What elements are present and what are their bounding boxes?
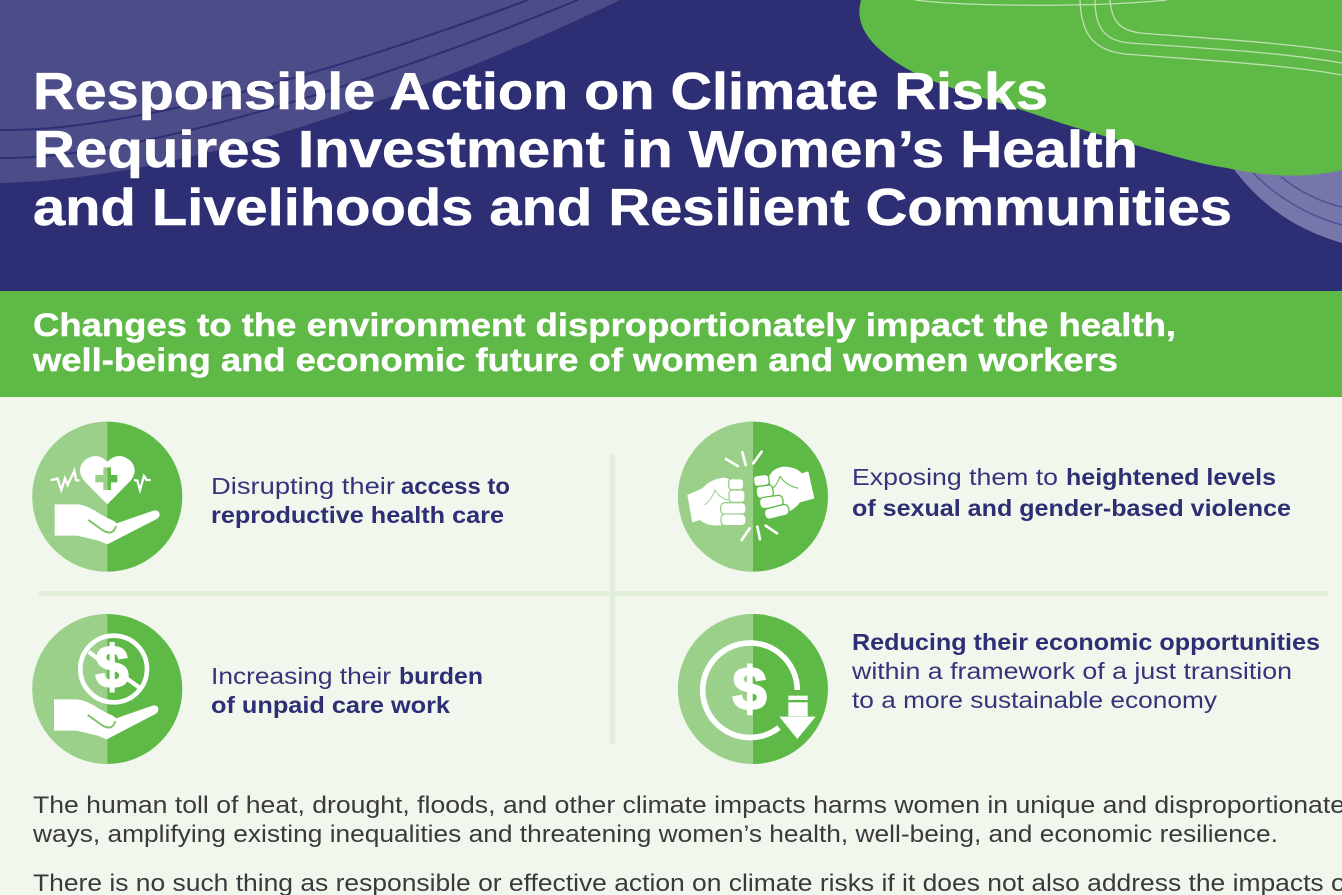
text: reproductive health care: Disrupting their bbox=[211, 473, 395, 499]
text: gender-based violence: Exposing them to bbox=[852, 464, 1058, 490]
icon: heart in hand bbox=[32, 422, 182, 572]
text: unpaid care work bbox=[211, 663, 483, 718]
text: unpaid care work: of unpaid care work bbox=[211, 692, 450, 718]
title: and Livelihoods and Resilient Communities bbox=[33, 179, 1232, 237]
icon: fist bump bbox=[678, 422, 828, 572]
text: gender-based violence: of sexual and gender-based violence bbox=[852, 495, 1291, 521]
body paragraph 1: The human toll of heat, drought, floods, and other climate impacts harms women in unique and disproportionate bbox=[33, 792, 1342, 819]
text: unpaid care work: burden bbox=[399, 663, 483, 689]
body paragraph 1 bbox=[32, 792, 1342, 848]
text: reproductive health care: reproductive health care bbox=[211, 502, 504, 528]
icon: crossed dollar in hand bbox=[32, 614, 182, 764]
body paragraph 1: ways, amplifying existing inequalities and threatening women’s health, well-being, and economic resilience. bbox=[32, 821, 1278, 848]
text: unpaid care work: Increasing their bbox=[211, 663, 391, 689]
green subheading band: well-being and economic future of women and women workers bbox=[32, 342, 1118, 378]
title: Responsible Action on Climate Risks bbox=[33, 63, 1048, 121]
green subheading band: Changes to the environment disproportionately impact the health, bbox=[33, 307, 1176, 343]
text: reproductive health care: access to bbox=[401, 473, 510, 499]
text: reproductive health care bbox=[211, 473, 510, 528]
text: economic opportunities: to a more sustainable economy bbox=[852, 687, 1218, 713]
text: economic opportunities bbox=[851, 629, 1320, 713]
text: gender-based violence: heightened levels bbox=[1066, 464, 1276, 490]
icon: crossed dollar in hand: $ bbox=[95, 633, 128, 700]
icon: dollar with down arrow: $ bbox=[733, 655, 767, 723]
icon: dollar with down arrow bbox=[678, 614, 828, 764]
text: gender-based violence bbox=[852, 464, 1291, 521]
title bbox=[33, 63, 1232, 237]
text: economic opportunities: Reducing their economic opportunities bbox=[852, 629, 1320, 655]
header banner bbox=[0, 0, 1342, 291]
text: economic opportunities: within a framework of a just transition bbox=[851, 658, 1292, 684]
title: Requires Investment in Women’s Health bbox=[33, 121, 1138, 179]
green subheading band bbox=[0, 291, 1342, 397]
